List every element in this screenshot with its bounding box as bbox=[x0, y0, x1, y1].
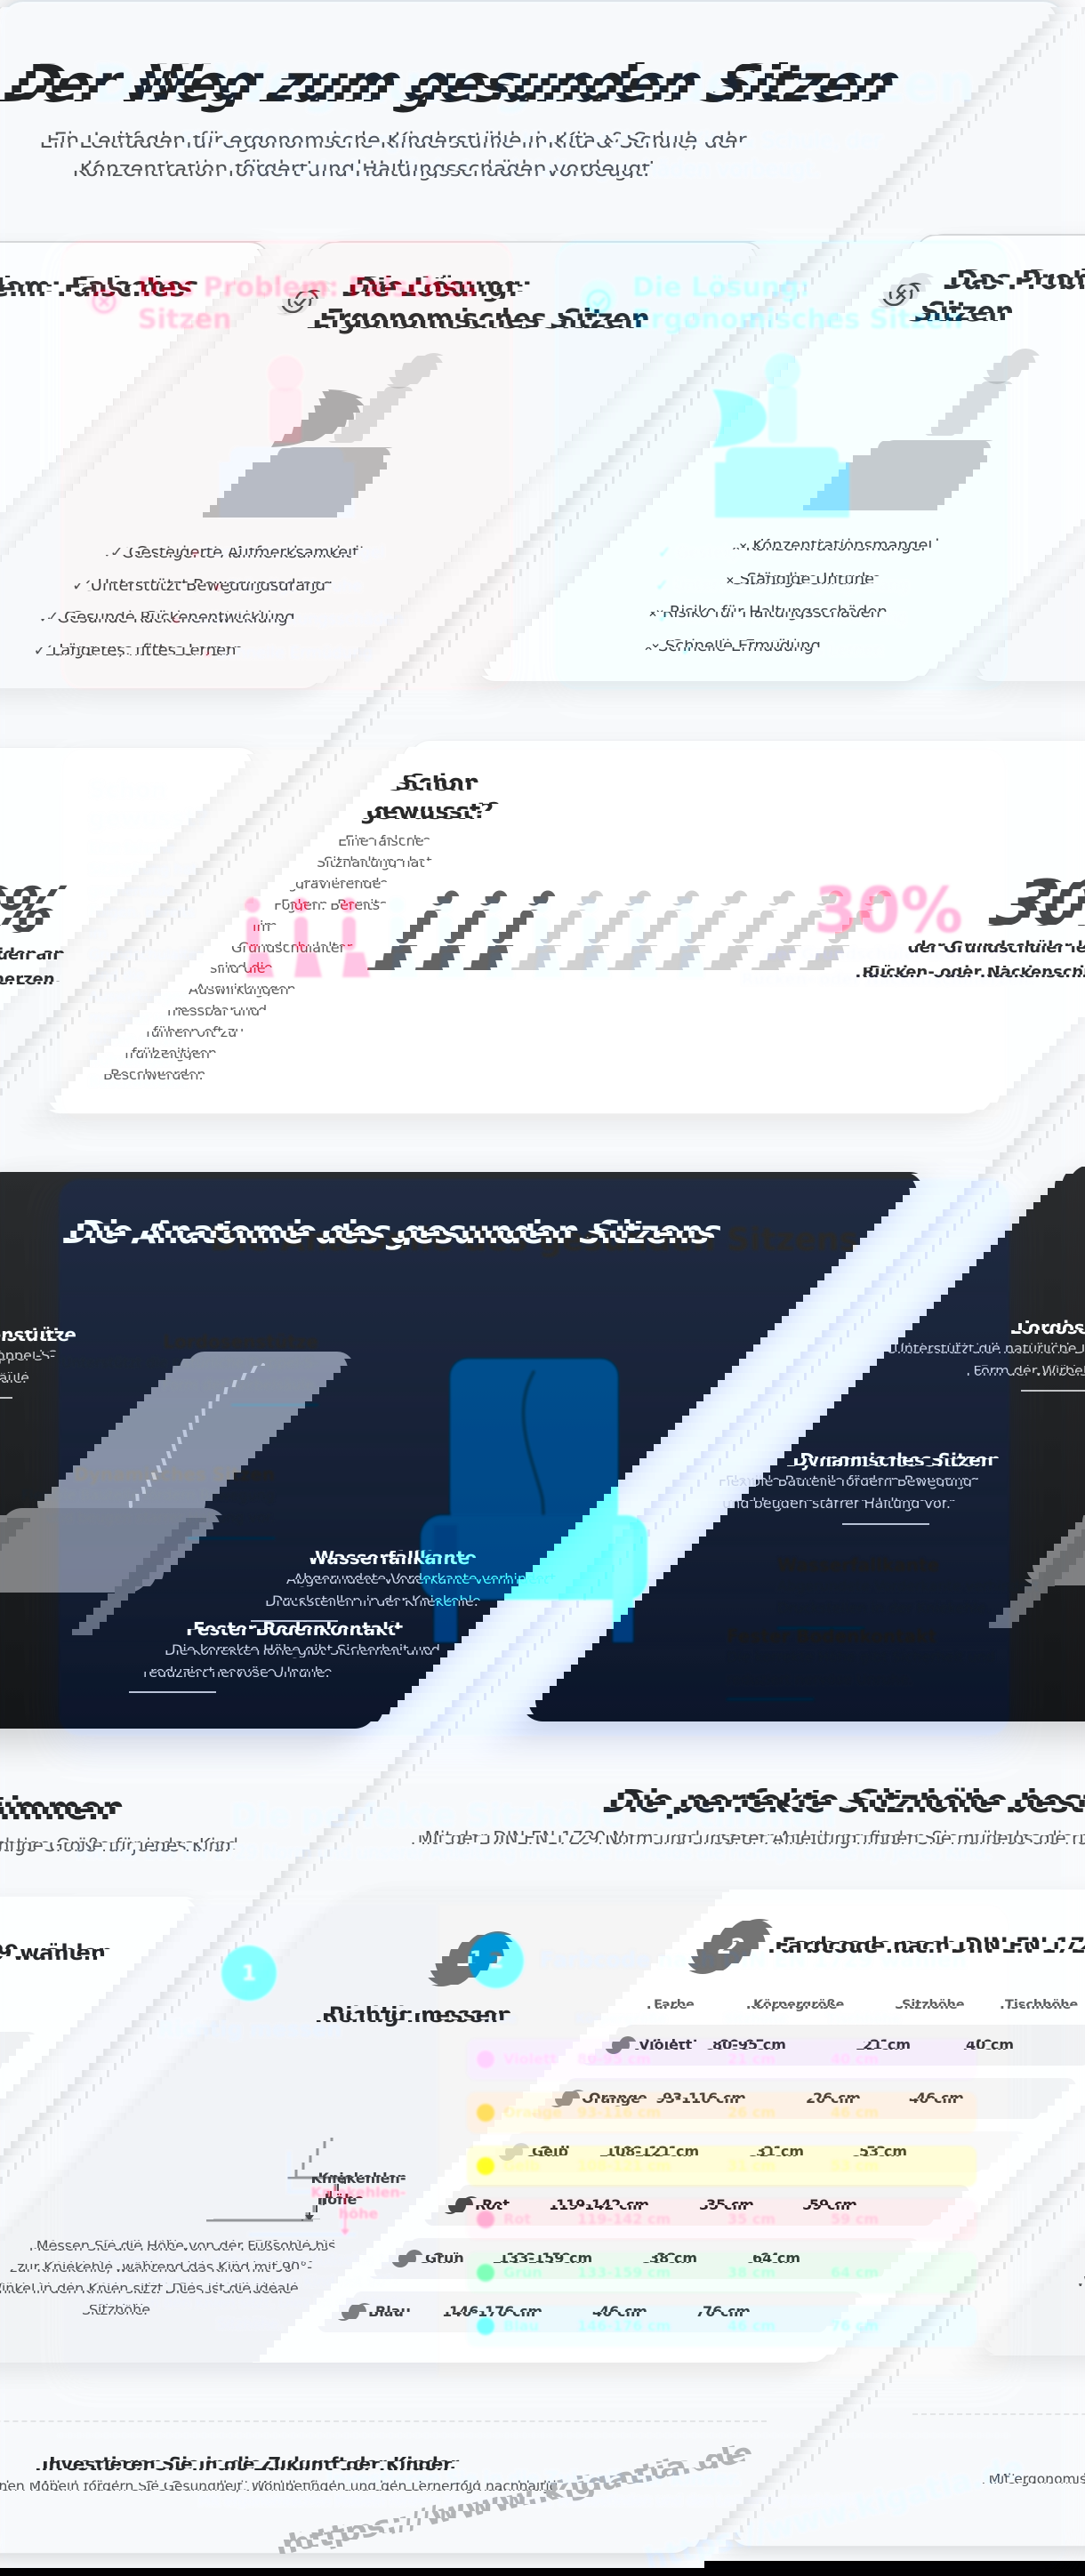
icon: cross in circle bbox=[86, 273, 934, 315]
diagram label: knee height bbox=[269, 2182, 447, 2225]
list: problems: ✕ Ständige Unruhe bbox=[213, 576, 362, 596]
title: Der Weg zum gesunden Sitzen bbox=[92, 54, 975, 114]
text: explanation bbox=[89, 838, 203, 1093]
list: problems bbox=[172, 539, 938, 662]
row: green: 64 cm bbox=[831, 2264, 879, 2281]
callout: waterfall edge: Druckstellen in der Kniekehle. bbox=[777, 1599, 991, 1617]
panel: measuring and colour code bbox=[62, 1904, 1009, 2377]
callout: waterfall edge bbox=[777, 1554, 1040, 1619]
heading: perfect seat height: Die perfekte Sitzhöhe bestimmen bbox=[231, 1798, 836, 1834]
table header bbox=[62, 1904, 976, 2030]
text: measuring instructions: Messen Sie die Höhe von der Fußsohle bis bbox=[100, 2251, 399, 2268]
footer text: Mit ergonomischen Möbeln fördern Sie Gesundheit, Wohlbefinden und den Lernerfolg nachhaltig. bbox=[199, 2492, 868, 2508]
row: orange: Orange bbox=[503, 2104, 562, 2121]
callout: floor contact: Die korrekte Höhe gibt Sicherheit und bbox=[727, 1649, 995, 1665]
callout: lumbar support bbox=[61, 1331, 318, 1396]
row: yellow: 31 cm bbox=[727, 2157, 776, 2174]
text: explanation: Sitzhaltung hat bbox=[89, 861, 197, 878]
callout: floor contact: reduziert nervöse Unruhe. bbox=[727, 1670, 913, 1688]
row: blue: 46 cm bbox=[727, 2317, 776, 2334]
text: explanation: führen oft zu bbox=[89, 1031, 180, 1047]
row: red bbox=[467, 2199, 976, 2240]
row: green bbox=[467, 2252, 976, 2293]
icon: check in circle bbox=[277, 280, 615, 316]
stat caption: Rücken- oder Nackenschmerzen. bbox=[742, 970, 1035, 989]
diagram: knee height bbox=[240, 2143, 418, 2245]
panel: statistic bbox=[60, 747, 1008, 1121]
illustration: ergonomic chair bbox=[59, 1179, 1009, 1736]
list: benefits: ✓ Unterstützt Bewegungsdrang bbox=[655, 576, 909, 594]
subtitle bbox=[41, 128, 882, 181]
heading: did you know: gewusst? bbox=[89, 806, 209, 832]
list: problems: ✕ Schnelle Ermüdung bbox=[203, 644, 373, 662]
row: yellow: 108-121 cm bbox=[577, 2157, 671, 2174]
text: measuring instructions: Sitzhöhe. bbox=[217, 2315, 283, 2332]
callout: floor contact bbox=[727, 1625, 995, 1690]
illustration: good posture bbox=[708, 351, 859, 520]
heading: colour code: Farbcode nach DIN EN 1729 wählen bbox=[540, 1947, 967, 1972]
list: benefits: ✓ Längeres, fittes Lernen bbox=[680, 640, 884, 660]
callout: waterfall edge: Abgerundete Vorderkante verhindert bbox=[777, 1577, 1040, 1594]
text: explanation: sind die bbox=[89, 967, 145, 983]
heading: problem: Das Problem: Falsches bbox=[138, 272, 477, 303]
heading: solution: Die Lösung: bbox=[632, 272, 810, 303]
row: blue: 76 cm bbox=[831, 2317, 879, 2334]
text: explanation: frühzeitigen bbox=[89, 1052, 174, 1069]
heading: anatomy: Die Anatomie des gesunden Sitzens bbox=[210, 1222, 858, 1258]
text: explanation: messbar und bbox=[89, 1009, 181, 1026]
row: orange: 93-116 cm bbox=[577, 2104, 661, 2121]
row: green: Grün bbox=[503, 2264, 542, 2281]
panel: problem card bbox=[61, 241, 512, 689]
callout: dynamic sitting: Dynamisches Sitzen bbox=[74, 1464, 275, 1485]
step number 1 bbox=[221, 1946, 277, 2001]
row: red: Rot bbox=[503, 2211, 531, 2227]
table header: Körpergröße bbox=[575, 2012, 666, 2026]
row: blue bbox=[467, 2306, 976, 2347]
row: green: 133-159 cm bbox=[577, 2264, 671, 2281]
callout: floor contact: Fester Bodenkontakt bbox=[727, 1625, 936, 1647]
row: yellow bbox=[467, 2146, 976, 2187]
row: violet: 40 cm bbox=[831, 2050, 879, 2067]
callout: lumbar support: Lordosenstütze bbox=[163, 1331, 318, 1352]
panel: step 1 measure bbox=[62, 1904, 438, 2377]
callout: dynamic sitting: Flexible Bauteile fördern Bewegung bbox=[21, 1487, 275, 1504]
row: red: 35 cm bbox=[727, 2211, 776, 2227]
stat caption: der Grundschüler leiden an bbox=[766, 945, 1011, 964]
row: violet: 21 cm bbox=[727, 2050, 776, 2067]
heading: problem bbox=[0, 269, 1085, 335]
table header: Sitzhöhe bbox=[724, 2012, 787, 2026]
table header: Tischhöhe bbox=[827, 2012, 900, 2026]
text: explanation: Beschwerden. bbox=[89, 1073, 189, 1090]
callout: dynamic sitting bbox=[21, 1464, 275, 1529]
text: explanation: Eine falsche bbox=[89, 839, 175, 856]
row: violet: 80-95 cm bbox=[577, 2050, 651, 2067]
row: yellow: Gelb bbox=[503, 2157, 540, 2174]
diagram label: knee height: Kniekehlen- bbox=[311, 2184, 406, 2201]
row: violet: Violett bbox=[503, 2050, 557, 2067]
table: colour code bbox=[467, 2009, 976, 2348]
row: orange: 46 cm bbox=[831, 2104, 879, 2121]
stat caption bbox=[622, 943, 1085, 992]
panel: solution card bbox=[556, 241, 1007, 689]
heading: did you know: Schon bbox=[89, 777, 167, 804]
callout: lumbar support: Form der Wirbelsäule. bbox=[162, 1376, 318, 1392]
row: violet bbox=[467, 2039, 976, 2080]
heading: solution: Ergonomisches Sitzen bbox=[632, 304, 963, 335]
heading: problem: Sitzen bbox=[138, 304, 231, 335]
subtitle: Konzentration fördert und Haltungsschäden vorbeugt. bbox=[243, 156, 821, 181]
list: benefits bbox=[557, 537, 1008, 667]
text: explanation: gravierende bbox=[89, 882, 175, 899]
row: blue: 146-176 cm bbox=[577, 2317, 671, 2334]
stat: 30 percent: 30% bbox=[814, 874, 963, 947]
row: orange: 26 cm bbox=[727, 2104, 776, 2121]
text: measuring instructions bbox=[62, 2250, 438, 2335]
subtitle: Ein Leitfaden für ergonomische Kinderstühle in Kita & Schule, der bbox=[181, 128, 882, 153]
callout: waterfall edge: Wasserfallkante bbox=[777, 1554, 939, 1576]
list: benefits: ✓ Gesunde Rückenentwicklung bbox=[657, 608, 907, 627]
row: orange bbox=[467, 2092, 976, 2133]
row: yellow: 53 cm bbox=[831, 2157, 879, 2174]
heading: solution bbox=[632, 272, 963, 336]
text: explanation: Folgen. Bereits bbox=[89, 903, 195, 920]
row: red: 59 cm bbox=[831, 2211, 879, 2227]
callout: lumbar support: Unterstützt die natürliche Doppel-S- bbox=[61, 1354, 318, 1371]
row: green: 38 cm bbox=[727, 2264, 776, 2281]
step number 1: 1 bbox=[242, 1961, 256, 1986]
text: measuring instructions: Winkel in den Knien sitzt. Dies ist die ideale bbox=[94, 2294, 406, 2311]
text: explanation: im bbox=[89, 925, 107, 942]
callout: dynamic sitting: und beugen starrer Haltung vor. bbox=[46, 1508, 275, 1526]
panel: anatomy bbox=[59, 1179, 1009, 1736]
list: benefits: ✓ Gesteigerte Aufmerksamkeit bbox=[658, 543, 906, 562]
table header: Farbe bbox=[476, 2012, 517, 2026]
illustration: bad posture bbox=[221, 349, 1040, 518]
footer bbox=[59, 2435, 1009, 2515]
list: problems: ✕ Konzentrationsmangel bbox=[191, 543, 384, 562]
icon row: ten children, three affected bbox=[241, 895, 703, 979]
footer heading: Investieren Sie in die Zukunft der Kinder. bbox=[326, 2468, 741, 2489]
list: problems: ✕ Risiko für Haltungsschäden bbox=[172, 610, 404, 629]
row: blue: Blau bbox=[503, 2317, 539, 2334]
heading: did you know bbox=[89, 776, 209, 833]
text: measuring instructions: zur Kniekehle, während das Kind mit 90°- bbox=[102, 2273, 398, 2290]
step number 2 bbox=[469, 1933, 524, 1988]
row: red: 119-142 cm bbox=[577, 2211, 671, 2227]
text: explanation: Auswirkungen bbox=[89, 988, 189, 1005]
step number 2: 2 bbox=[489, 1948, 503, 1973]
heading: measure: Richtig messen bbox=[158, 2017, 342, 2042]
subtitle: seat height: Mit der DIN EN 1729 Norm und unserer Anleitung finden Sie mühelos die richtige Größe für jedes Kind. bbox=[76, 1842, 991, 1863]
text: explanation: Grundschulalter bbox=[89, 946, 203, 963]
diagram label: knee height: höhe bbox=[339, 2205, 378, 2222]
